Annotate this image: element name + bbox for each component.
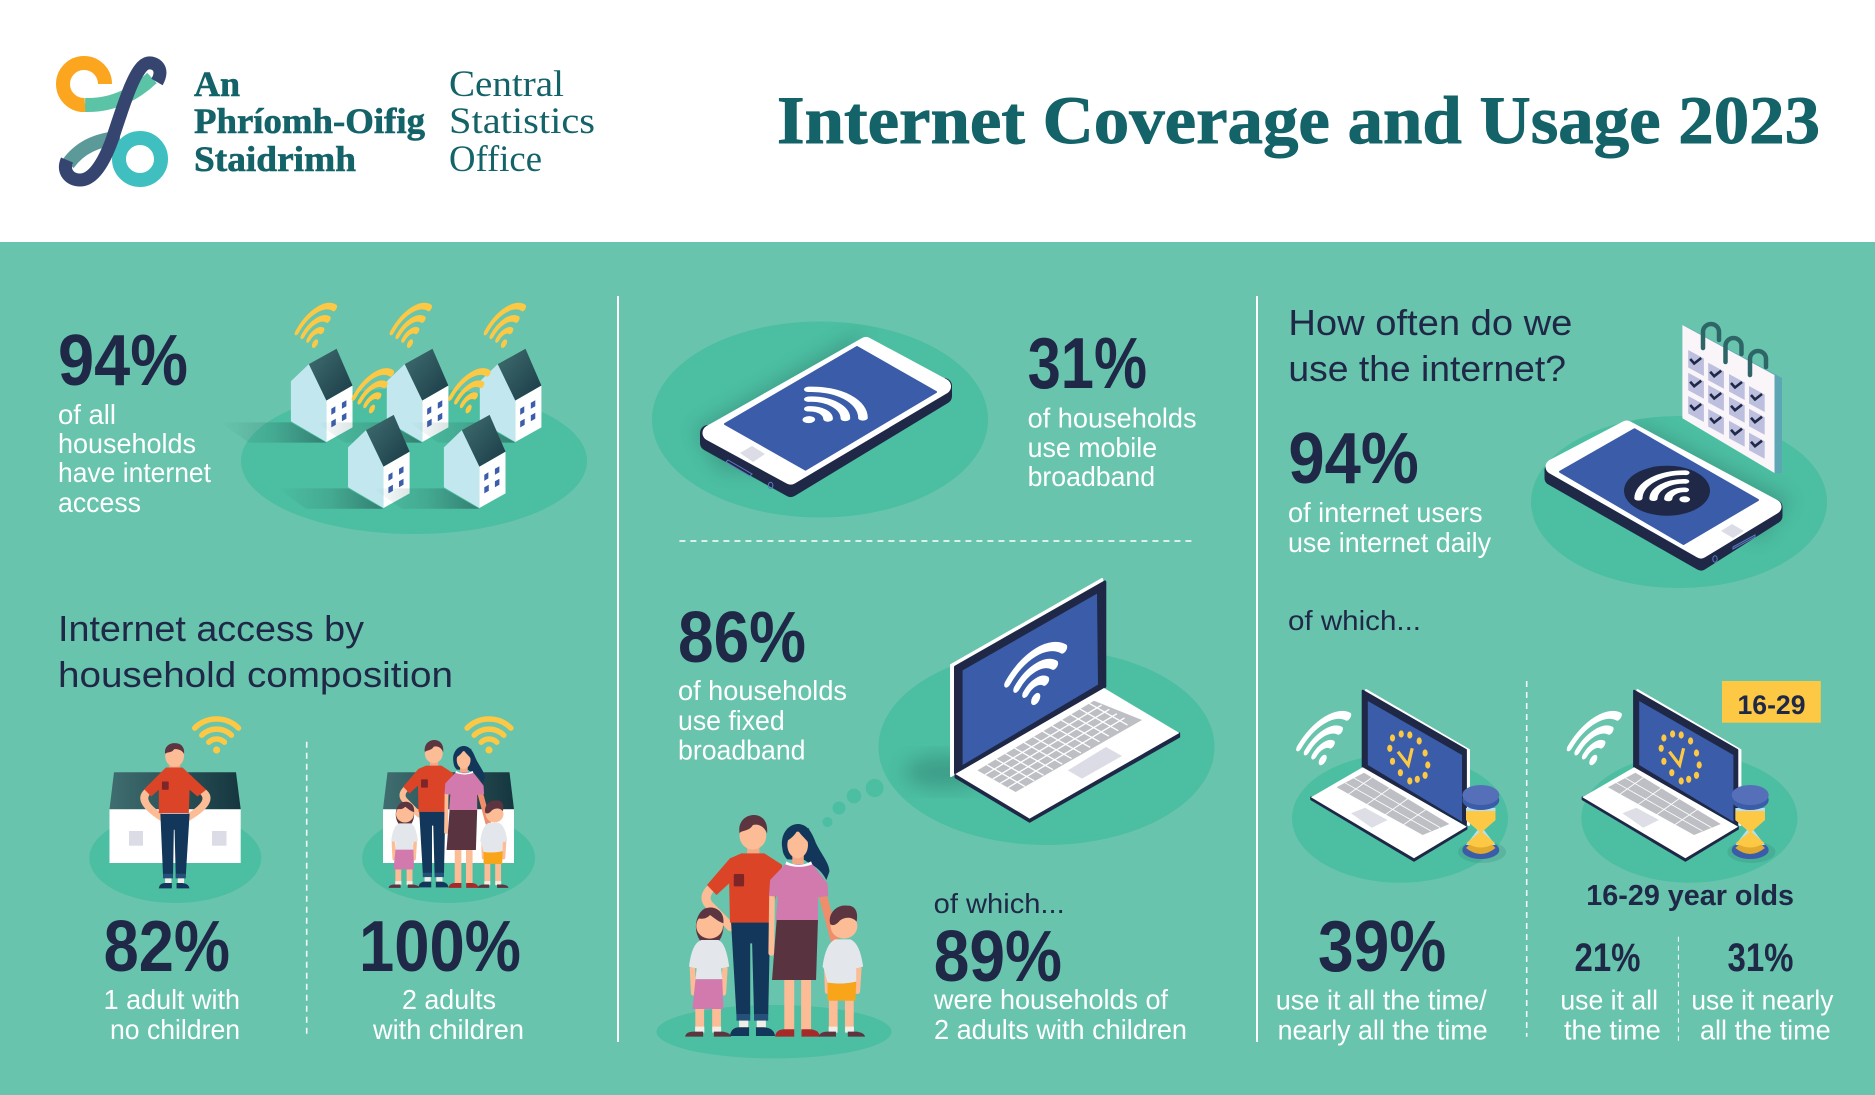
stat: 100%: 100%: [359, 907, 521, 987]
stat: 21% use it all the time: 21%: [1574, 936, 1640, 980]
logo text: Irish name: Phríomh-Oifig: [194, 101, 425, 141]
caption: use mobile broadband: [1028, 402, 1197, 492]
caption: 2 adults with children: [372, 984, 524, 1045]
illustration: phone and calendar: [1531, 324, 1827, 588]
heading: internet access by household composition: Internet access by: [58, 608, 364, 649]
stat: 94% of households: households: [58, 428, 196, 459]
heading: how often do we use the internet: use the internet?: [1288, 348, 1566, 389]
stat: 94% of internet users: of internet users: [1288, 497, 1483, 528]
stat: 94% of internet users: use internet daily: [1288, 527, 1491, 558]
stat: 31% use it nearly all the time: use it nearly: [1691, 984, 1833, 1015]
stat: 21% use it all the time: the time: [1564, 1014, 1661, 1045]
badge: 16-29: [1722, 681, 1821, 723]
caption: use mobile broadband: of households: [1028, 402, 1197, 434]
stat: 21% use it all the time: [1560, 936, 1661, 1045]
column divider left: [617, 296, 619, 1042]
stat: 39%: 39%: [1318, 907, 1446, 987]
caption: 2 adults with children: 2 adults: [402, 984, 496, 1015]
stat: of which 89%: 2 adults with children: [934, 1014, 1187, 1045]
stat: 21% use it all the time: use it all: [1560, 984, 1658, 1015]
caption: use fixed broadband: [678, 675, 847, 766]
heading: how often do we use the internet: [1288, 302, 1572, 389]
panel: 1 adult with no children: [89, 719, 261, 1045]
caption: use mobile broadband: use mobile: [1028, 432, 1157, 463]
header background: [0, 0, 1875, 242]
caption: use fixed broadband: broadband: [678, 735, 806, 766]
stat: 94% of internet users: [1288, 419, 1491, 558]
stat: 94% of households: [58, 321, 211, 518]
illustration: single adult in front of house: [89, 719, 261, 903]
illustration: family in front of house: [362, 719, 535, 903]
illustration: laptop with clock and hourglass, young adults: [1569, 690, 1797, 883]
illustration: houses with wifi: [220, 298, 587, 534]
column divider right: [1256, 296, 1258, 1042]
stat: of which 89%: 89%: [934, 917, 1062, 997]
caption: use fixed broadband: of households: [678, 675, 847, 706]
panel: 2 adults with children: [359, 719, 535, 1045]
caption: 1 adult with no children: [104, 984, 240, 1045]
caption: 1 adult with no children: no children: [110, 1014, 240, 1045]
heading: 16-29 year olds: 16-29 year olds: [1586, 880, 1794, 912]
heading: how often do we use the internet: How often do we: [1288, 302, 1572, 343]
stat: of which 89%: [933, 888, 1187, 1045]
icon: thought bubbles: [822, 779, 884, 827]
illustration: laptop with wifi: [878, 579, 1214, 845]
stat: 94% of internet users: 94%: [1288, 419, 1419, 499]
illustration: family of four: [656, 815, 892, 1058]
badge: 16-29: 16-29: [1738, 690, 1806, 720]
caption: 1 adult with no children: 1 adult with: [104, 984, 240, 1015]
illustration: smartphone with wifi: [652, 322, 988, 518]
stat: 94% of households: access: [58, 487, 141, 518]
panel: all adults all the time: [1276, 690, 1508, 1045]
logo text: English name: Office: [449, 139, 542, 180]
stat: 31% use it nearly all the time: [1691, 936, 1833, 1045]
caption: use it all the time: [1276, 984, 1488, 1045]
stat: 82%: 82%: [104, 907, 230, 987]
stat: 31%: 31%: [1028, 324, 1147, 404]
stat: of which 89%: of which...: [934, 888, 1065, 919]
stat: 31% use it nearly all the time: 31%: [1728, 936, 1794, 980]
caption: use fixed broadband: use fixed: [678, 705, 785, 736]
stat: 94% of households: 94%: [58, 321, 188, 401]
main teal background: [0, 242, 1875, 1095]
text: of which: of which...: [1288, 605, 1421, 636]
title: Internet Coverage and Usage 2023: [777, 82, 1820, 158]
stat: 31% use it nearly all the time: all the time: [1700, 1014, 1831, 1045]
logo text: Irish name: [194, 64, 425, 179]
stat: of which 89%: were households of: [933, 984, 1168, 1015]
logo text: English name: Statistics: [449, 101, 595, 142]
stat: 94% of households: have internet: [58, 457, 211, 488]
caption: use mobile broadband: broadband: [1028, 461, 1155, 492]
logo text: English name: Central: [449, 64, 564, 105]
logo text: Irish name: An: [194, 64, 240, 104]
panel: 16-29 year olds: [1560, 681, 1833, 1045]
stat: 86%: 86%: [678, 598, 806, 678]
panel: household internet access: [58, 298, 587, 534]
illustration: laptop with clock and hourglass: [1292, 690, 1508, 883]
heading: internet access by household composition: household composition: [58, 654, 453, 695]
logo: Central Statistics Office mark: [63, 63, 161, 180]
logo text: English name: [449, 64, 595, 180]
panel: mobile broadband: [652, 322, 1197, 518]
heading: internet access by household composition: [58, 608, 453, 695]
caption: use it all the time: use it all the time/: [1276, 984, 1487, 1015]
logo text: Irish name: Staidrimh: [194, 139, 356, 179]
caption: 2 adults with children: with children: [372, 1014, 524, 1045]
stat: 94% of households: of all: [58, 399, 116, 430]
caption: use it all the time: nearly all the time: [1278, 1014, 1488, 1045]
panel: fixed broadband: [656, 579, 1214, 1058]
panel: daily use: [1288, 324, 1827, 636]
